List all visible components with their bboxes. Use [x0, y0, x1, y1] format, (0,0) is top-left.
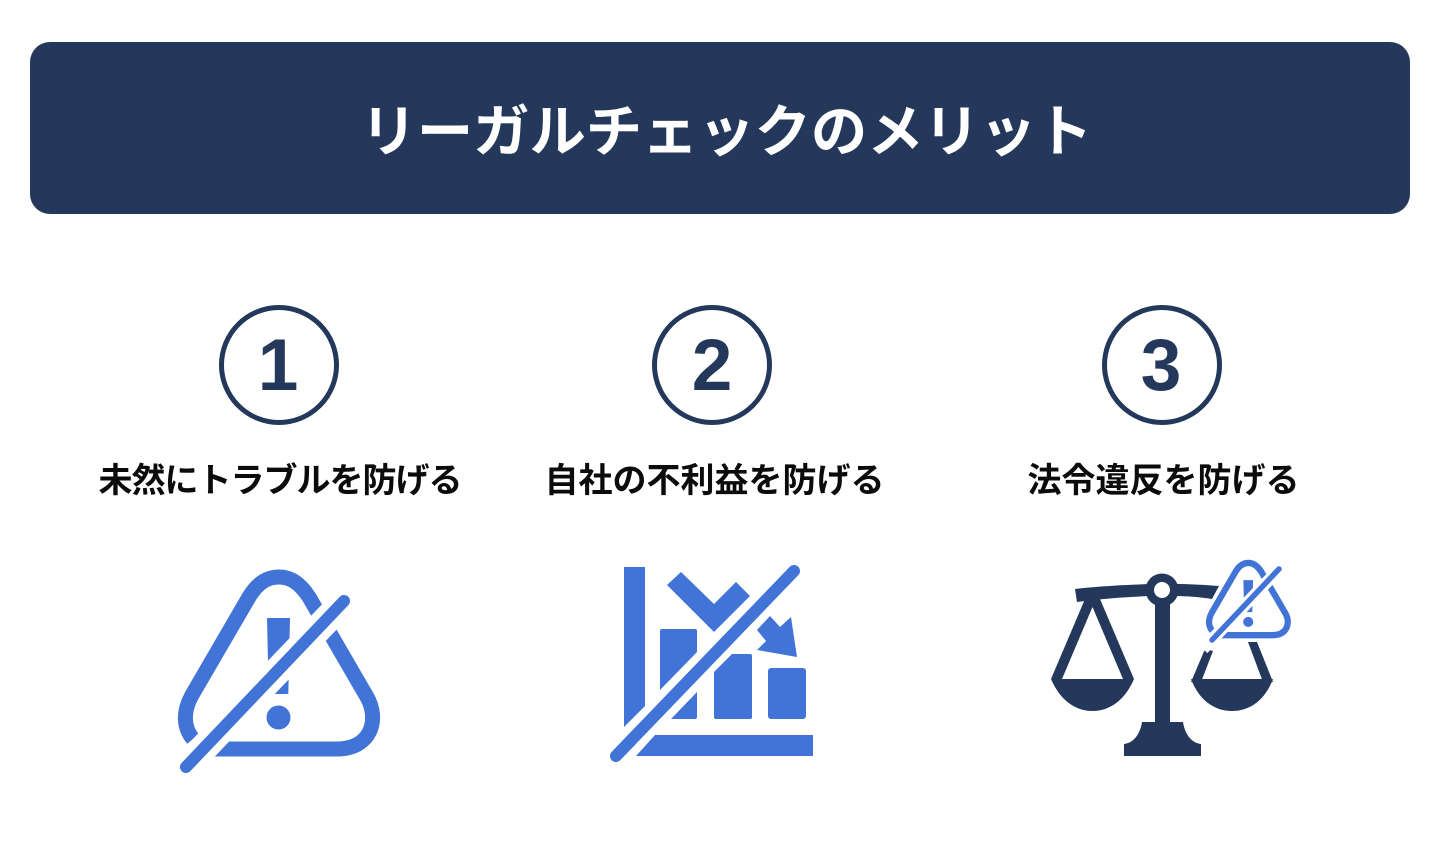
title banner: リーガルチェックのメリット — [361, 100, 1092, 163]
number badge 1: 1 — [258, 325, 298, 406]
icon: scales of justice — [1051, 574, 1273, 756]
label 1: 未然にトラブルを防げる — [98, 462, 462, 500]
number badge 1 — [219, 305, 339, 425]
number badge 3: 3 — [1141, 325, 1181, 406]
icon: declining bar chart crossed out — [616, 567, 813, 756]
number badge 3 — [1102, 305, 1222, 425]
number badge 2 — [652, 305, 772, 425]
label 2: 自社の不利益を防げる — [544, 462, 884, 500]
title banner — [30, 42, 1410, 214]
icon: warning triangle crossed out — [170, 577, 373, 783]
label 3: 法令違反を防げる — [1028, 462, 1300, 500]
icon: small warning triangle crossed out — [1203, 560, 1288, 649]
number badge 2: 2 — [692, 325, 732, 406]
